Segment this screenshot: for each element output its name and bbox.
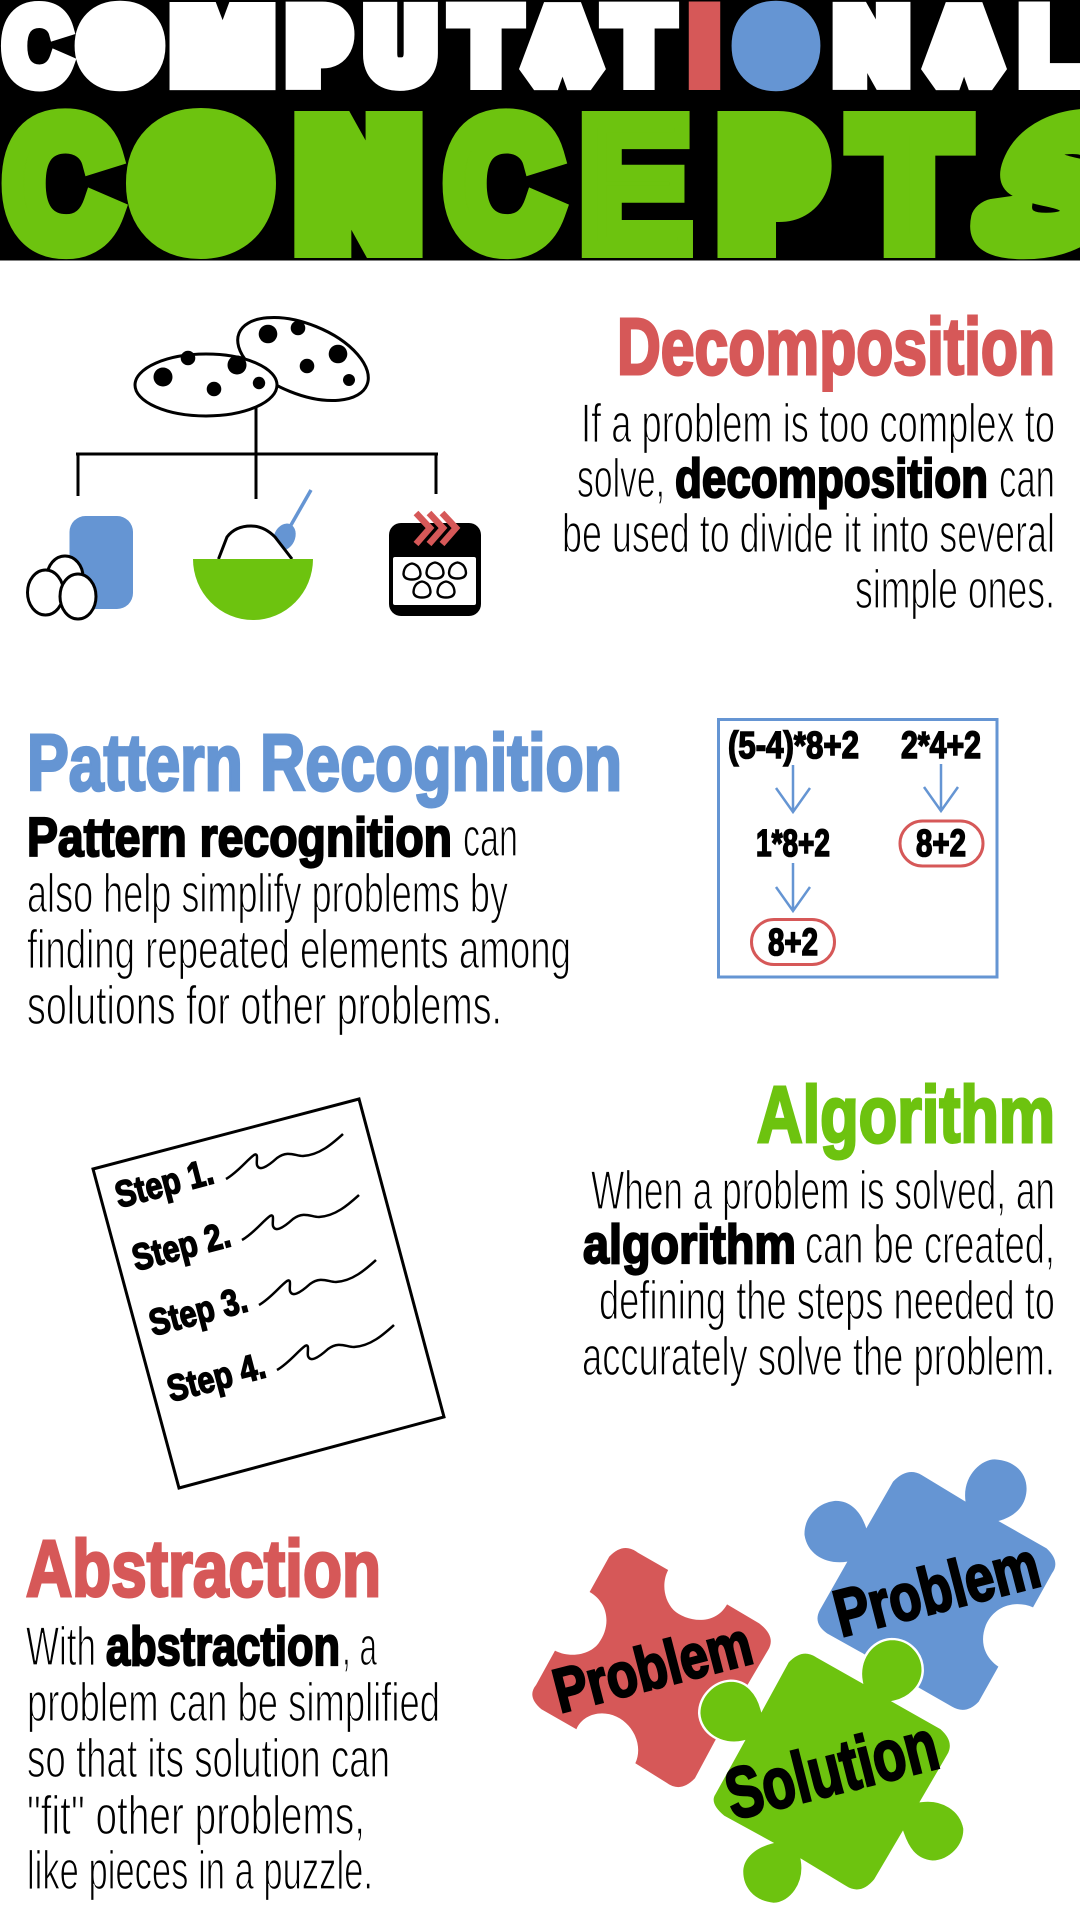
- step 1: Step 1.: [111, 1151, 218, 1216]
- title banner: [0, 0, 1080, 290]
- body: abstraction: abstraction: [106, 1615, 340, 1677]
- body: pattern recognition: Pattern recognition: [27, 806, 452, 868]
- title line: CONCEPTS: O: [151, 114, 251, 256]
- title line: CONCEPTS: [6, 80, 1080, 290]
- expression: 2*4+2: 2*4+2: [901, 725, 981, 767]
- puzzle piece: blue problem: [804, 1459, 1055, 1710]
- title line: COMPUTATIONAL: O: [90, 5, 150, 89]
- heading: Abstraction: Abstraction: [26, 1524, 381, 1613]
- body: decomposition: solve,: [577, 447, 665, 509]
- body: abstraction: "fit" other problems,: [27, 1784, 365, 1846]
- step 4: [163, 1325, 394, 1410]
- body: abstraction: problem can be simplified: [27, 1671, 440, 1733]
- step 4: Step 4.: [163, 1345, 270, 1410]
- panel: pattern recognition math diagram: [718, 720, 997, 977]
- pill: 8+2 left: 8+2: [768, 922, 818, 964]
- title line: COMPUTATIONAL: A: [532, 0, 593, 92]
- body: abstraction: With: [26, 1615, 96, 1677]
- title line: CONCEPTS: C: [6, 85, 118, 283]
- title line: CONCEPTS: E: [578, 80, 692, 290]
- icon: flour bag and eggs: [28, 516, 133, 619]
- panel: algorithm text: [582, 1070, 1055, 1387]
- panel: algorithm steps sheet: [93, 1099, 444, 1488]
- pill: 8+2 right: 8+2: [916, 823, 966, 865]
- title line: CONCEPTS: T: [854, 86, 965, 284]
- body: pattern recognition: [27, 806, 571, 1036]
- tree connector lines: [76, 408, 438, 499]
- puzzle piece: red problem: Problem: [546, 1609, 759, 1727]
- panel: pattern recognition text: [27, 718, 622, 1036]
- step 3: [145, 1260, 376, 1344]
- panel: puzzle pieces: [532, 1459, 1055, 1904]
- expression: (5-4)*8+2: (5-4)*8+2: [728, 725, 859, 767]
- title line: COMPUTATIONAL: A: [934, 0, 994, 92]
- body: abstraction: , a: [342, 1615, 377, 1677]
- panel: abstraction text: [26, 1524, 440, 1901]
- icon: mixing bowl with spoon: [193, 490, 313, 620]
- body: abstraction: like pieces in a puzzle.: [27, 1839, 373, 1901]
- step 2: [128, 1195, 359, 1279]
- icon: oven with heat chevrons: [389, 513, 481, 616]
- body: pattern recognition: solutions for other problems.: [27, 974, 502, 1036]
- step 3: Step 3.: [145, 1279, 252, 1344]
- puzzle piece: green solution: [699, 1639, 965, 1904]
- expression: 1*8+2: 1*8+2: [756, 823, 830, 865]
- body: algorithm: algorithm: [583, 1213, 796, 1275]
- body: abstraction: so that its solution can: [27, 1727, 390, 1789]
- arrow: down: [924, 764, 958, 811]
- arrow: down: [776, 863, 810, 911]
- body: algorithm: [582, 1159, 1055, 1387]
- body: decomposition: decomposition: [675, 447, 988, 509]
- title line: COMPUTATIONAL: O: [747, 4, 805, 90]
- puzzle piece: red problem: [532, 1548, 771, 1787]
- body: abstraction: [26, 1615, 440, 1901]
- title line: CONCEPTS: C: [447, 85, 559, 283]
- body: pattern recognition: finding repeated elements among: [27, 918, 571, 980]
- arrow: down: [776, 765, 810, 812]
- title line: CONCEPTS: N: [303, 96, 414, 273]
- panel: decomposition illustration: [28, 301, 481, 620]
- panel: decomposition text: [562, 302, 1055, 620]
- heading: Pattern Recognition: Pattern Recognition: [27, 718, 622, 807]
- body: pattern recognition: can: [463, 806, 518, 868]
- title line: COMPUTATIONAL: [4, 0, 1080, 106]
- step 1: [111, 1134, 343, 1216]
- step 2: Step 2.: [128, 1214, 235, 1279]
- body: pattern recognition: also help simplify problems by: [27, 862, 508, 924]
- body: decomposition: [562, 392, 1055, 620]
- title line: CONCEPTS: P: [728, 101, 816, 267]
- puzzle piece: green solution: Solution: [717, 1705, 946, 1836]
- icon: two cookies: [135, 301, 380, 417]
